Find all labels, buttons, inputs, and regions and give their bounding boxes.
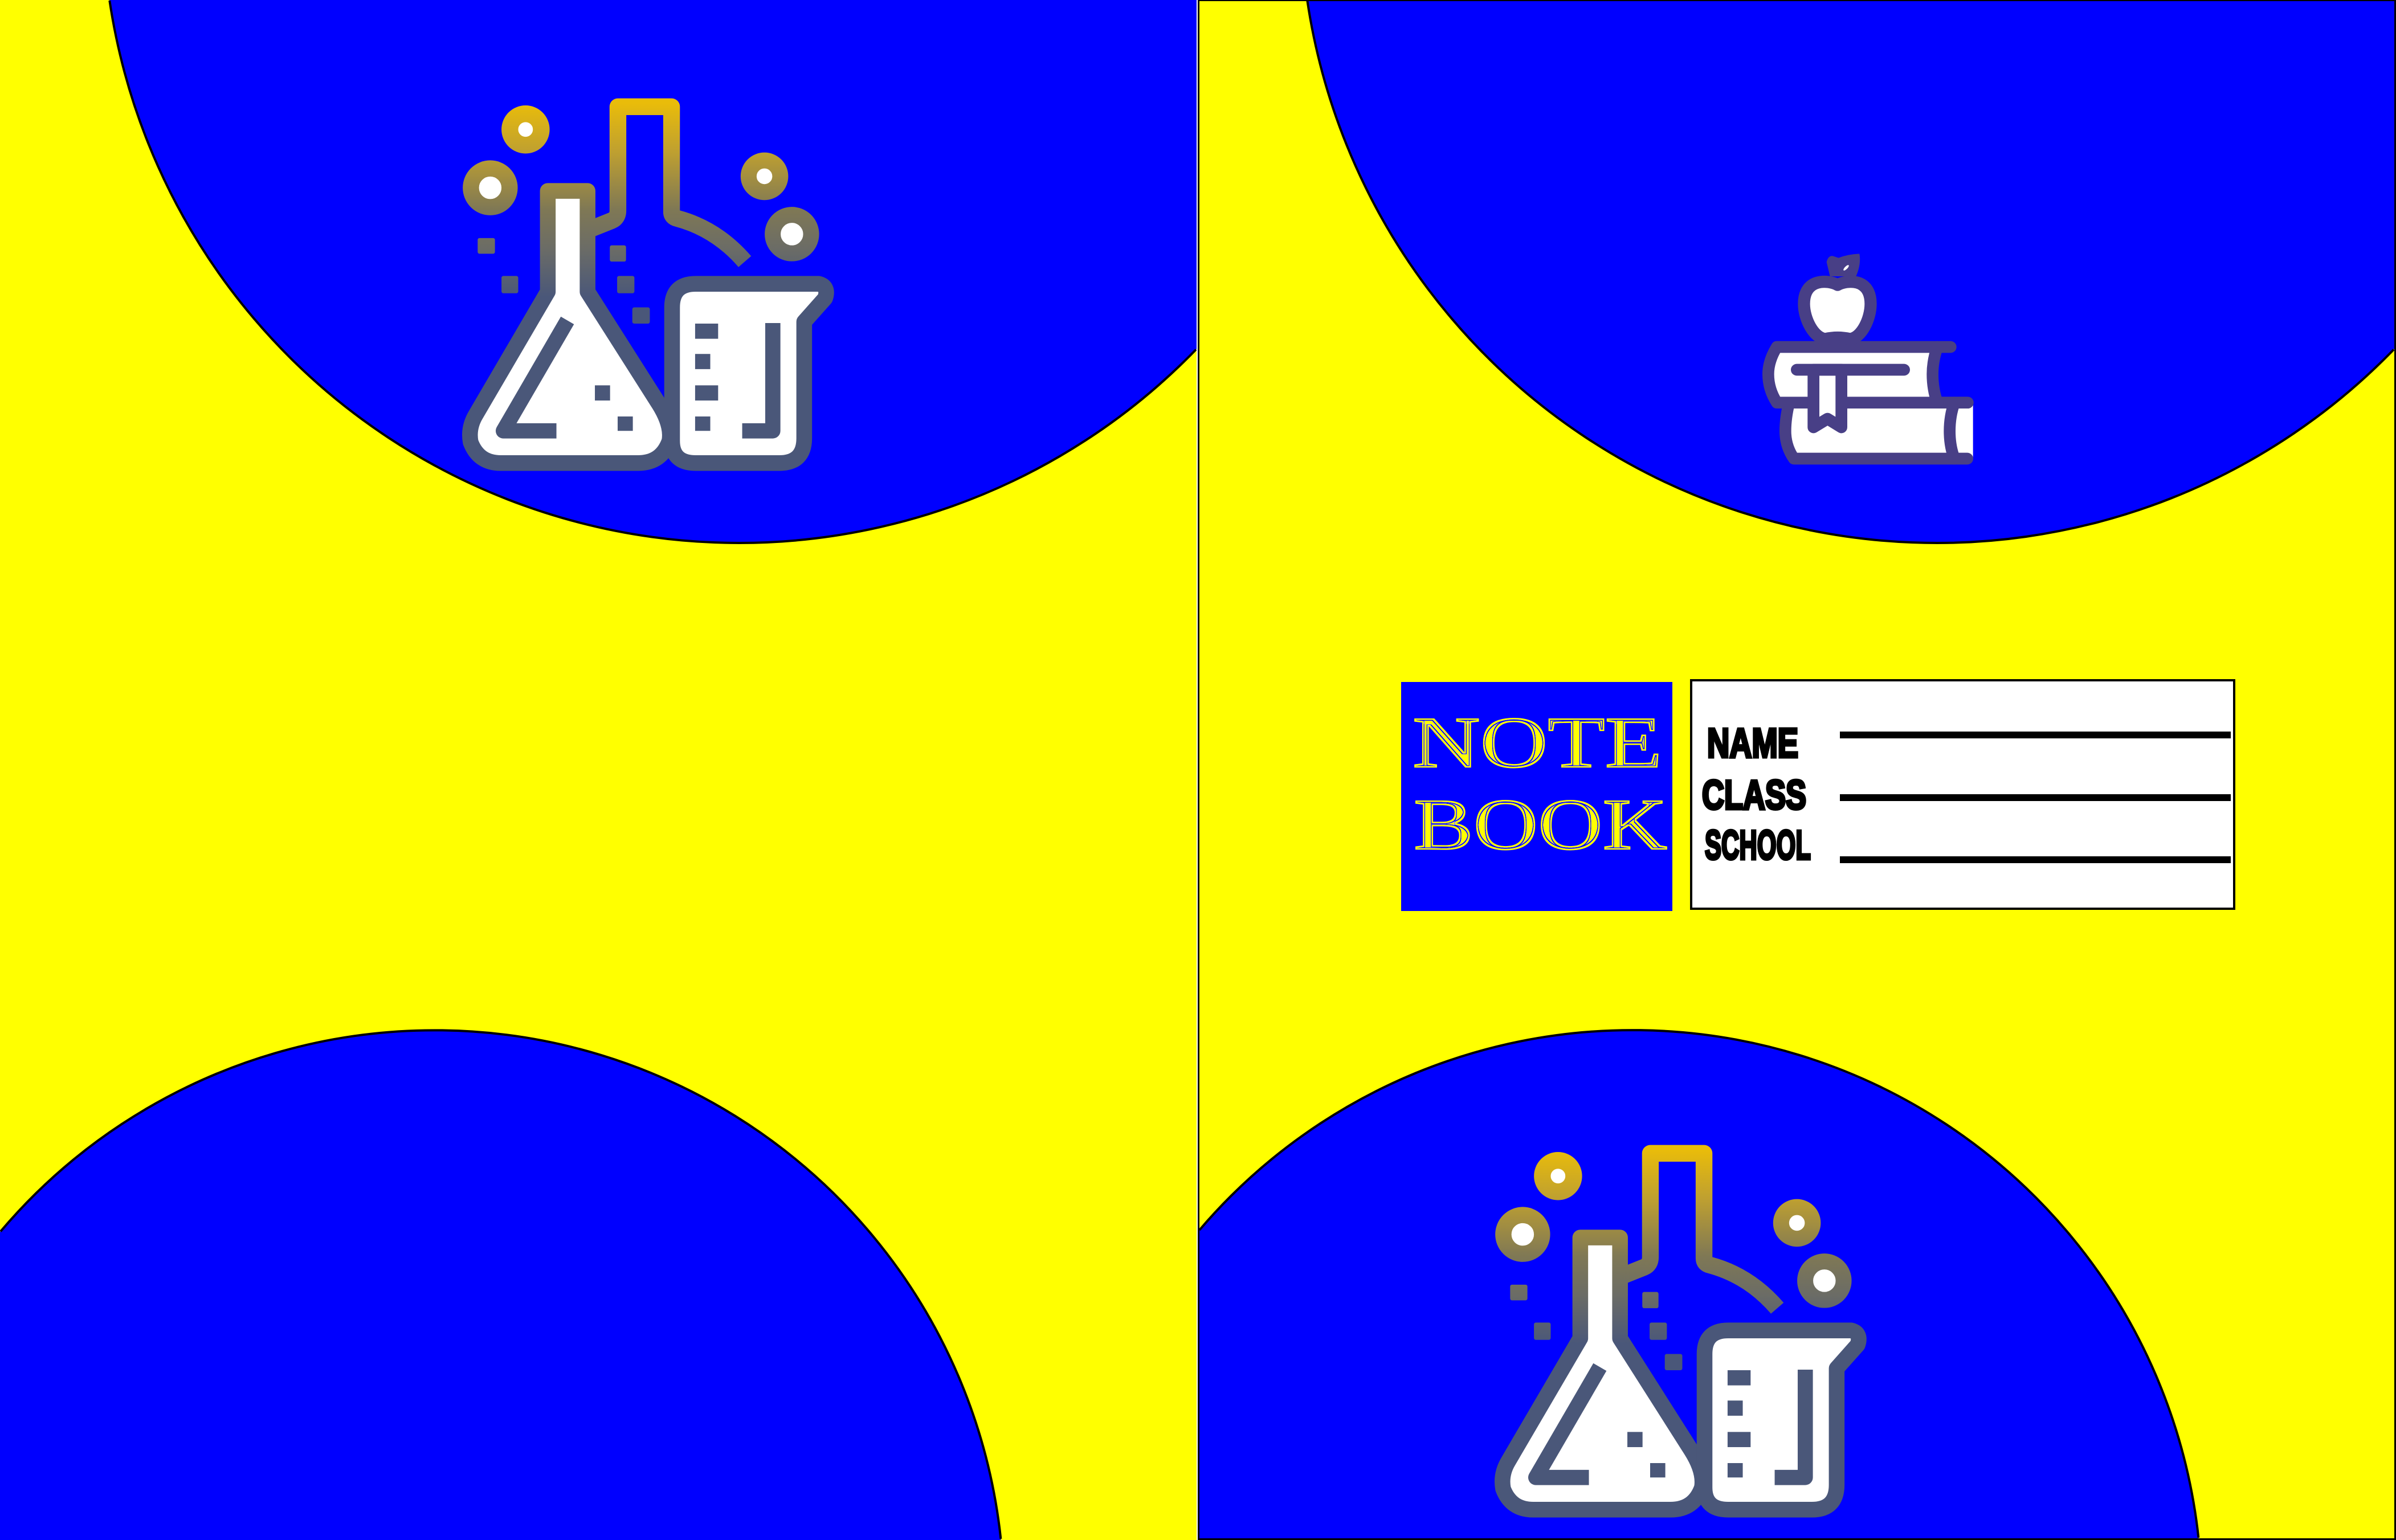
- icon: apple on books: [1768, 254, 1973, 459]
- spine divider and front cover border: [1197, 0, 2396, 1540]
- bottom blue circle, back cover: [0, 1030, 1001, 1540]
- panel: name, class and school form: [1691, 680, 2234, 909]
- form write-in lines: [1840, 732, 2231, 863]
- icon: laboratory flasks, back cover: [470, 107, 826, 463]
- bottom blue circle, front cover: [1199, 1030, 2199, 1538]
- top blue circle, front cover: [1307, 0, 2394, 543]
- form labels: NAME: [1707, 721, 1798, 766]
- form labels: CLASS: [1702, 773, 1806, 818]
- title text: BOOK: [1414, 784, 1667, 865]
- form labels: [1702, 721, 1811, 868]
- panel: back cover: [0, 0, 1197, 1540]
- panel: notebook title box: [1401, 682, 1672, 911]
- title text: NOTE: [1413, 702, 1662, 783]
- form labels: SCHOOL: [1705, 823, 1811, 868]
- panel: front cover: [1199, 0, 2394, 1538]
- title text: [1413, 702, 1667, 865]
- top blue circle, back cover: [109, 0, 1197, 543]
- icon: laboratory flasks, front cover: [1503, 1153, 1859, 1510]
